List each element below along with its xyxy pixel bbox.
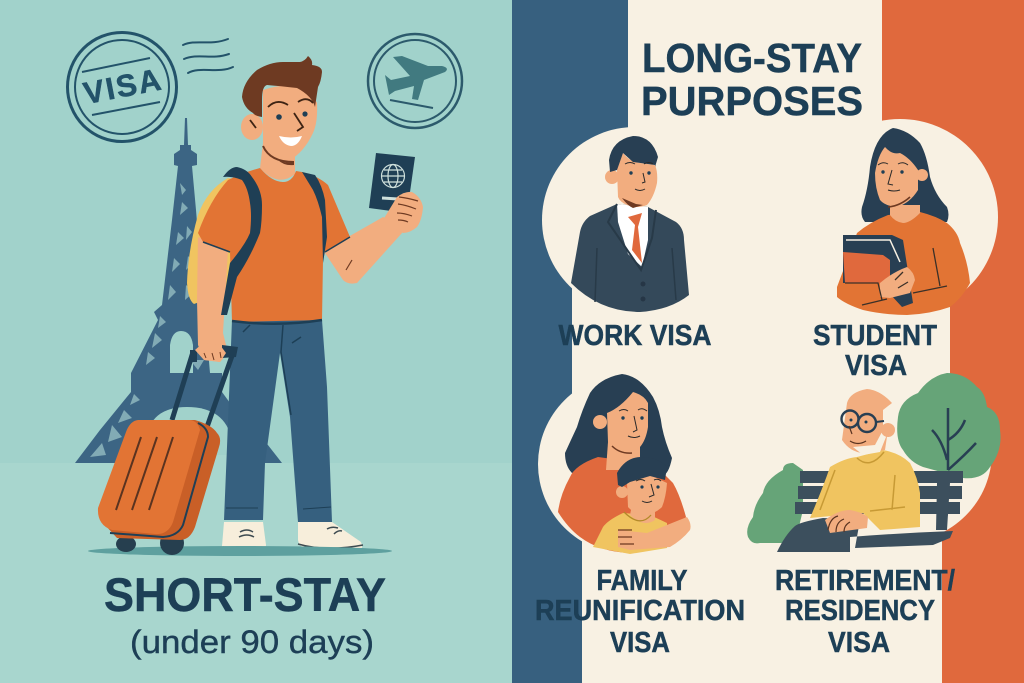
icon: plane stamp bbox=[368, 34, 462, 128]
label: student visa: VISA bbox=[845, 350, 907, 382]
label: family reunification visa: FAMILY bbox=[596, 565, 688, 597]
heading: long-stay purposes: PURPOSES bbox=[641, 78, 863, 124]
illustration: work visa man bbox=[571, 136, 689, 312]
passport bbox=[369, 153, 415, 213]
straps bbox=[221, 167, 262, 315]
shoes bbox=[222, 522, 266, 554]
illustration: Eiffel Tower bbox=[75, 118, 282, 463]
panel: short-stay background bbox=[0, 0, 512, 683]
label: family reunification visa: VISA bbox=[610, 627, 670, 659]
shirt bbox=[198, 168, 350, 322]
icon: VISA stamp: VISA bbox=[80, 62, 164, 111]
trousers bbox=[224, 320, 332, 522]
label: retirement residency visa bbox=[775, 565, 955, 659]
left arm bbox=[197, 237, 228, 362]
illustration: suitcase bbox=[98, 343, 238, 555]
label: family reunification visa: REUNIFICATION bbox=[535, 595, 745, 627]
label: retirement residency visa: VISA bbox=[828, 627, 890, 659]
label: student visa: STUDENT bbox=[813, 320, 937, 352]
right hand bbox=[383, 192, 423, 233]
right arm bbox=[325, 217, 402, 284]
heading: long-stay purposes: LONG-STAY bbox=[642, 35, 862, 81]
heading: long-stay purposes bbox=[641, 35, 863, 124]
label: work visa: WORK VISA bbox=[558, 320, 712, 352]
label: retirement residency visa: RETIREMENT/ bbox=[775, 565, 955, 597]
heading: short-stay: SHORT-STAY bbox=[104, 568, 386, 621]
illustration: ground shadow bbox=[88, 546, 392, 556]
icon: VISA stamp bbox=[68, 32, 176, 142]
text: under 90 days: (under 90 days) bbox=[130, 624, 374, 660]
panel: long-stay tricolour background bbox=[512, 0, 1024, 683]
hair bbox=[242, 56, 322, 117]
label: family reunification visa bbox=[535, 565, 745, 659]
icon: postmark wavy lines bbox=[183, 39, 233, 73]
face bbox=[263, 86, 317, 160]
illustration: mother and child bbox=[558, 374, 691, 554]
label: student visa bbox=[813, 320, 937, 382]
backpack bbox=[187, 178, 240, 304]
illustration: retiree on bench with tree bbox=[747, 373, 1001, 552]
illustration: student woman bbox=[837, 128, 970, 315]
facial details bbox=[250, 99, 313, 131]
label: retirement residency visa: RESIDENCY bbox=[785, 595, 935, 627]
illustration: traveller bbox=[187, 56, 423, 554]
neck bbox=[260, 143, 295, 180]
